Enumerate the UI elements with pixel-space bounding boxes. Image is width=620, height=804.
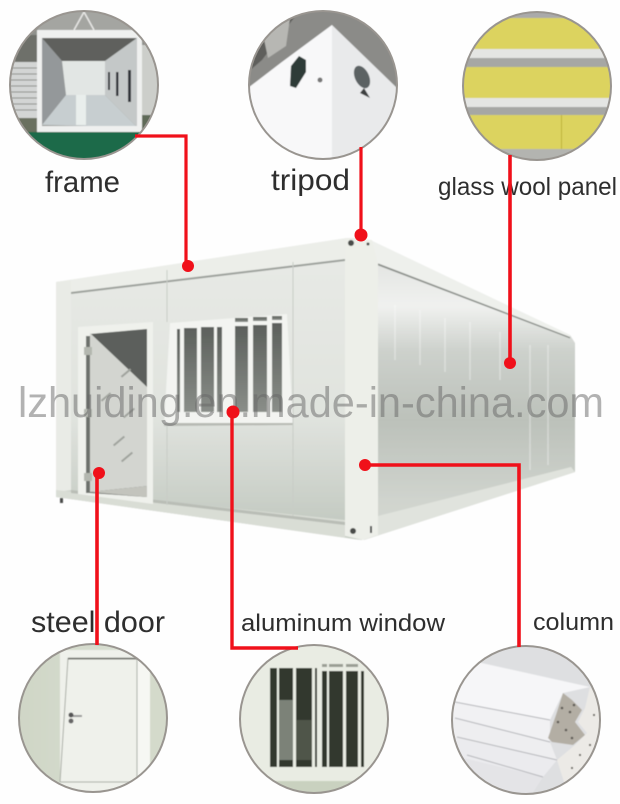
door opening xyxy=(90,329,147,497)
corner holes xyxy=(290,56,306,88)
container house xyxy=(56,238,575,540)
side top beam xyxy=(370,240,570,338)
side bottom beam xyxy=(364,467,575,540)
photo: glass wool panel xyxy=(462,10,614,162)
side wall vertical streaks xyxy=(395,305,548,470)
window panes xyxy=(177,316,282,412)
panel seams xyxy=(455,702,557,777)
label: tripod: tripod xyxy=(271,164,350,197)
bright floor reflection xyxy=(76,95,86,125)
door frame xyxy=(78,322,153,504)
steel door circle outline xyxy=(19,644,167,792)
front wall xyxy=(56,238,362,540)
label: steel door: steel door xyxy=(31,606,165,639)
red connector: frame xyxy=(135,136,194,272)
column cut end xyxy=(548,693,585,745)
white corner xyxy=(331,24,396,158)
photo: tripod xyxy=(248,10,400,160)
glass wool circle outline xyxy=(463,12,611,160)
hall interior xyxy=(42,38,137,61)
photo: aluminum window xyxy=(238,644,390,797)
door handle xyxy=(70,715,82,717)
label: glass wool panel: glass wool panel xyxy=(438,173,617,201)
wall panel seam xyxy=(167,262,293,516)
label: column: column xyxy=(533,609,614,636)
door leaf print marks xyxy=(101,368,135,462)
label: aluminum window: aluminum window xyxy=(241,610,446,637)
watermark: lzhuiding.en.made-in-china.com xyxy=(18,379,604,427)
photo: frame xyxy=(9,10,162,162)
frame circle outline xyxy=(10,11,158,159)
red connector: steel door xyxy=(93,467,105,645)
photo: column xyxy=(450,645,602,797)
green floor xyxy=(28,132,140,158)
window reflection xyxy=(279,700,293,760)
corner fittings xyxy=(60,240,372,534)
column circle outline xyxy=(452,646,600,794)
red connector: glass wool panel xyxy=(504,155,516,369)
open door leaf xyxy=(90,333,147,492)
red connector: tripod xyxy=(354,147,368,242)
top beam xyxy=(56,238,347,295)
side wall xyxy=(364,240,575,540)
corner column xyxy=(345,238,378,540)
door jamb strip xyxy=(86,336,90,493)
photo: steel door xyxy=(18,642,170,794)
bottom beam xyxy=(56,490,360,540)
left stacked panels xyxy=(9,62,37,118)
aluminum window circle outline xyxy=(240,645,388,793)
label: frame: frame xyxy=(45,166,120,199)
side doorways xyxy=(108,70,131,102)
red connector: column xyxy=(359,459,519,647)
left post xyxy=(56,280,71,492)
red connector: aluminum window xyxy=(226,406,298,648)
white steel frame xyxy=(37,30,142,132)
door hinges xyxy=(84,347,92,481)
tripod circle outline xyxy=(249,11,397,159)
window frame xyxy=(164,314,293,425)
